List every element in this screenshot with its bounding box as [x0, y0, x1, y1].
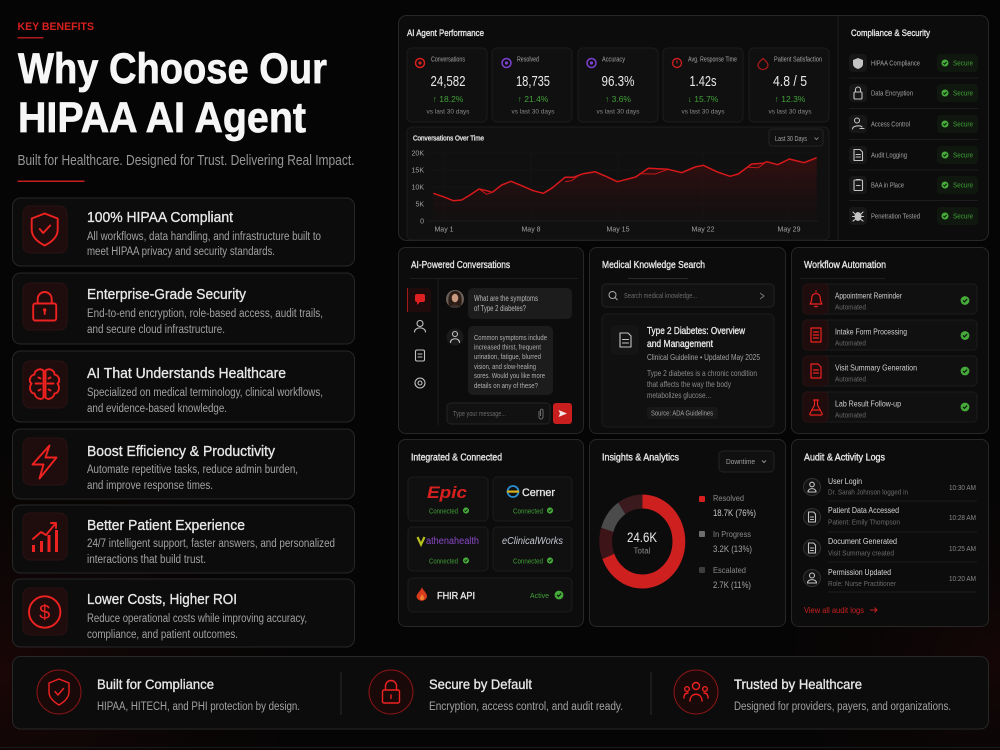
workflow: Appointment Reminder	[803, 284, 977, 314]
KPI: Conversations: 24,582	[430, 74, 466, 90]
sidebar: navigation icons	[407, 288, 431, 388]
KPI: Avg. Response Time: 1.42s	[690, 74, 716, 90]
icon: dollar circle: $	[39, 602, 50, 624]
integration: Cerner: Connected	[513, 508, 543, 516]
search box	[602, 284, 774, 307]
message input	[447, 403, 550, 424]
legend: Resolved	[713, 493, 744, 503]
row: Access Control: Access Control	[871, 122, 910, 128]
eyebrow: key benefits	[18, 21, 94, 38]
panel: Boost Efficiency & Productivity: Boost Efficiency & Productivity	[87, 443, 275, 460]
trust item: Built for Compliance: HIPAA, HITECH, and PHI protection by design.	[97, 701, 300, 713]
KPI: Avg. Response Time: vs last 30 days	[682, 108, 725, 116]
legend: 2.7K (11%)	[713, 580, 751, 590]
row: Access Control	[849, 115, 978, 133]
log: User Login: Dr. Sarah Johnson logged in	[828, 488, 908, 496]
panel: Compliance & Security: Compliance & Security	[851, 28, 930, 39]
chart: conversations over time: Last 30 Days	[775, 136, 807, 143]
chart: conversations over time: Conversations Over Time	[413, 134, 484, 142]
workflow: Lab Result Follow-up	[803, 392, 977, 422]
KPI: Accuracy: vs last 30 days	[596, 108, 640, 116]
chat bubble: assistant answer: Common symptoms include	[474, 333, 547, 342]
chat bubble: assistant answer: sores. Would you like more	[474, 371, 545, 380]
KPI: Patient Satisfaction: ↑ 12.3%	[775, 94, 806, 104]
subtitle: Built for Healthcare. Designed for Trust. Delivering Real Impact.	[18, 153, 354, 169]
panel: Compliance & Security	[849, 28, 978, 225]
workflow: Lab Result Follow-up: Automated	[835, 410, 866, 420]
icon: lock	[33, 292, 56, 320]
log: User Login: User Login	[828, 477, 862, 486]
integration: Cerner: Cerner	[522, 487, 555, 499]
trust item: Secure by Default: Secure by Default	[429, 676, 532, 692]
panel: Better Patient Experience: Better Patient Experience	[87, 517, 245, 534]
panel: Better Patient Experience	[12, 505, 354, 573]
KPI: Patient Satisfaction	[749, 48, 829, 122]
log: Document Generated	[804, 537, 976, 558]
row: Access Control: Secure	[953, 122, 973, 128]
legend: In Progress	[713, 529, 751, 539]
row: Audit Logging: Secure	[953, 152, 973, 160]
integration: eClinicalWorks	[493, 527, 572, 571]
KPI: Accuracy: ↑ 3.6%	[605, 94, 631, 104]
integration: FHIR API: Active	[530, 591, 549, 600]
integration: eClinicalWorks: eClinicalWorks	[502, 536, 563, 547]
row: BAA in Place: Secure	[953, 182, 973, 190]
workflow: Lab Result Follow-up: Lab Result Follow-up	[835, 400, 901, 408]
chat bubble: assistant answer	[468, 326, 553, 395]
KPI: Resolved: ↑ 21.4%	[518, 94, 549, 104]
search result card: and Management	[647, 339, 713, 350]
chart: conversations over time: 5K	[415, 202, 424, 208]
title	[18, 45, 327, 142]
log: Document Generated: 10:25 AM	[949, 544, 976, 553]
chat bubble: assistant answer: urination, fatigue, blurred	[474, 352, 541, 361]
KPI: Resolved	[492, 48, 572, 122]
title: Why Choose Our	[18, 45, 327, 93]
panel: Boost Efficiency & Productivity	[12, 429, 354, 499]
chart: conversations over time	[407, 127, 829, 240]
dropdown: Downtime	[719, 451, 774, 472]
row: Penetration Tested: Secure	[953, 214, 973, 220]
trust item: Secure by Default: Encryption, access control, and audit ready.	[429, 701, 623, 713]
donut total: 24.6K	[627, 529, 658, 545]
icon: lightning bolt	[32, 446, 56, 478]
panel: Audit & Activity Logs	[792, 440, 988, 626]
row: BAA in Place	[849, 176, 978, 194]
chat bubble: patient question: What are the symptoms	[474, 294, 538, 303]
integration: athenahealth: athenahealth	[426, 536, 479, 547]
panel: Workflow Automation: Workflow Automation	[804, 260, 886, 271]
panel: 100% HIPAA Compliant: 100% HIPAA Compliant	[87, 209, 234, 226]
row: Data Encryption: Data Encryption	[871, 90, 913, 98]
panel: Lower Costs, Higher ROI	[12, 579, 354, 647]
chat bubble: patient question: of Type 2 diabetes?	[474, 304, 526, 313]
icon: growth chart	[32, 523, 58, 552]
avatar: patient	[446, 290, 464, 308]
donut chart	[591, 486, 693, 597]
panel: Insights & Analytics: Insights & Analytics	[602, 452, 679, 464]
integration: eClinicalWorks: Connected	[513, 558, 543, 566]
send button	[553, 403, 572, 424]
row: HIPAA Compliance: HIPAA Compliance	[871, 60, 920, 68]
log: Patient Data Accessed: Patient Data Accessed	[828, 506, 899, 515]
KPI: Avg. Response Time: ↓ 15.7%	[688, 94, 719, 104]
trust item: Secure by Default	[369, 670, 623, 714]
row: Penetration Tested: Penetration Tested	[871, 214, 920, 220]
trust item: Trusted by Healthcare: Designed for providers, payers, and organizations.	[734, 701, 951, 713]
log: Permission Updated	[804, 568, 976, 588]
KPI: Patient Satisfaction: Patient Satisfaction	[774, 56, 822, 64]
workflow: Intake Form Processing: Intake Form Processing	[835, 328, 907, 336]
panel: Medical Knowledge Search	[590, 248, 786, 434]
chart: conversations over time: 20K	[412, 150, 424, 158]
panel: Audit & Activity Logs: Audit & Activity Logs	[804, 452, 885, 464]
panel: Integrated & Connected: Integrated & Connected	[411, 452, 502, 464]
panel: AI Agent Performance: AI Agent Performance	[407, 28, 484, 39]
KPI: Patient Satisfaction: vs last 30 days	[768, 108, 812, 116]
KPI: Avg. Response Time: Avg. Response Time	[688, 56, 737, 64]
search result card: Clinical Guideline • Updated May 2025	[647, 353, 760, 362]
integration: FHIR API	[408, 578, 572, 612]
panel: AI-Powered Conversations: AI-Powered Conversations	[411, 260, 510, 271]
chart: conversations over time: May 1	[434, 226, 454, 234]
dropdown: Downtime: Downtime	[726, 457, 755, 466]
panel: AI Agent Performance	[398, 16, 988, 240]
panel: Enterprise-Grade Security: End-to-end encryption, role-based access, audit trails,	[87, 308, 323, 320]
row: Audit Logging	[849, 146, 978, 164]
log: Permission Updated: 10:20 AM	[949, 574, 976, 583]
log: Document Generated: Visit Summary created	[828, 548, 894, 558]
log: Permission Updated: Role: Nurse Practitioner	[828, 579, 897, 588]
log: User Login: 10:30 AM	[949, 483, 976, 492]
KPI: Resolved: Resolved	[517, 56, 539, 64]
row: Data Encryption: Secure	[953, 90, 973, 98]
KPI: Resolved: 18,735	[516, 74, 550, 90]
integration: Epic	[408, 477, 488, 521]
legend: 3.2K (13%)	[713, 544, 752, 554]
integration: athenahealth	[408, 527, 488, 571]
workflow: Visit Summary Generation: Visit Summary Generation	[835, 364, 917, 372]
chart: conversations over time: May 8	[521, 226, 541, 234]
row: Data Encryption	[849, 84, 978, 102]
panel: bottom trust bar	[12, 656, 988, 729]
integration: athenahealth: Connected	[429, 558, 458, 566]
panel: AI That Understands Healthcare: Specialized on medical terminology, clinical workflows,	[87, 387, 323, 399]
KPI: Conversations	[407, 48, 487, 122]
workflow: Visit Summary Generation: Automated	[835, 374, 866, 384]
KPI: Accuracy	[578, 48, 658, 122]
workflow: Appointment Reminder: Appointment Reminder	[835, 292, 902, 300]
KPI: Accuracy: Accuracy	[602, 56, 625, 64]
panel: AI That Understands Healthcare	[12, 351, 354, 422]
KPI: Conversations: ↑ 18.2%	[433, 94, 464, 104]
avatar: assistant	[446, 328, 464, 346]
search result card	[602, 314, 774, 427]
integration: Epic: Epic	[427, 483, 468, 502]
chart: conversations over time: May 22	[692, 226, 715, 234]
log: Permission Updated: Permission Updated	[828, 568, 891, 577]
workflow: Intake Form Processing	[803, 320, 977, 350]
workflow: Appointment Reminder: Automated	[835, 302, 866, 312]
log: Patient Data Accessed: 10:28 AM	[949, 513, 976, 522]
icon: dollar circle	[29, 596, 60, 628]
panel: Better Patient Experience: 24/7 intelligent support, faster answers, and personalized	[87, 538, 335, 550]
panel: Integrated & Connected	[398, 440, 584, 626]
panel: Boost Efficiency & Productivity: and improve response times.	[87, 480, 213, 492]
integration: Epic: Connected	[429, 508, 458, 516]
title: HIPAA AI Agent	[18, 94, 306, 142]
chart: conversations over time: May 29	[778, 226, 801, 234]
log: User Login	[804, 477, 976, 496]
link: view all audit logs: View all audit logs	[804, 605, 864, 615]
chat bubble: assistant answer: details on any of these?	[474, 381, 538, 390]
legend	[699, 493, 756, 590]
trust item: Built for Compliance: Built for Compliance	[97, 676, 214, 692]
log: Document Generated: Document Generated	[828, 537, 897, 546]
panel: Lower Costs, Higher ROI: compliance, and patient outcomes.	[87, 629, 238, 641]
panel: 100% HIPAA Compliant: meet HIPAA privacy and security standards.	[87, 246, 275, 258]
eyebrow: key benefits: KEY BENEFITS	[18, 21, 94, 33]
panel: Boost Efficiency & Productivity: Automate repetitive tasks, reduce admin burden,	[87, 464, 298, 476]
panel: Enterprise-Grade Security: and secure cloud infrastructure.	[87, 324, 225, 336]
message input: Type your message...	[453, 409, 506, 418]
icon: shield check	[32, 214, 58, 246]
trust item: Built for Compliance	[37, 670, 300, 714]
legend: 18.7K (76%)	[713, 508, 756, 518]
panel: AI-Powered Conversations	[398, 248, 584, 434]
search result card: that affects the way the body	[647, 380, 731, 389]
donut total	[627, 529, 658, 556]
KPI: Accuracy: 96.3%	[602, 74, 635, 90]
icon: brain	[30, 369, 59, 399]
workflow: Intake Form Processing: Automated	[835, 338, 866, 348]
chart: conversations over time: May 15	[607, 226, 630, 234]
log: Patient Data Accessed: Patient: Emily Thompson	[828, 518, 900, 526]
trust item: Trusted by Healthcare	[674, 670, 951, 714]
panel: Insights & Analytics	[590, 440, 786, 626]
panel: Workflow Automation	[792, 248, 988, 434]
panel: 100% HIPAA Compliant	[12, 198, 354, 266]
log: Patient Data Accessed	[804, 506, 976, 526]
search result card: metabolizes glucose...	[647, 391, 711, 400]
KPI: Patient Satisfaction: 4.8 / 5	[773, 74, 807, 90]
integration: Cerner	[493, 477, 572, 521]
workflow: Visit Summary Generation	[803, 356, 977, 386]
panel: Lower Costs, Higher ROI: Lower Costs, Higher ROI	[87, 591, 237, 608]
search box: Search medical knowledge...	[624, 291, 697, 300]
KPI: Resolved: vs last 30 days	[512, 108, 555, 116]
search result card: Type 2 diabetes is a chronic condition	[647, 369, 757, 378]
trust item: Trusted by Healthcare: Trusted by Healthcare	[734, 676, 862, 692]
panel: 100% HIPAA Compliant: All workflows, data handling, and infrastructure built to	[87, 231, 321, 243]
panel: Lower Costs, Higher ROI: Reduce operational costs while improving accuracy,	[87, 613, 307, 625]
chart: conversations over time: 0	[420, 218, 424, 226]
search result card: Type 2 Diabetes: Overview	[647, 326, 746, 337]
search result card: Source: ADA Guidelines	[651, 408, 713, 418]
row: BAA in Place: BAA in Place	[871, 182, 904, 190]
chat bubble: assistant answer: increased thirst, frequent	[474, 342, 542, 352]
chart: conversations over time: 15K	[412, 168, 424, 174]
row: Audit Logging: Audit Logging	[871, 152, 907, 160]
KPI: Conversations: Conversations	[431, 56, 465, 64]
KPI: Conversations: vs last 30 days	[426, 108, 470, 116]
row: Penetration Tested	[849, 207, 978, 225]
row: HIPAA Compliance	[849, 54, 978, 72]
donut total: Total	[634, 546, 651, 556]
integration: FHIR API: FHIR API	[437, 590, 475, 602]
panel: Better Patient Experience: interactions that build trust.	[87, 554, 206, 566]
KPI: Avg. Response Time	[663, 48, 743, 122]
panel: AI That Understands Healthcare: and evidence-based knowledge.	[87, 403, 227, 415]
chat bubble: assistant answer: vision, and slow-healing	[474, 362, 536, 371]
row: HIPAA Compliance: Secure	[953, 60, 973, 68]
panel: Medical Knowledge Search: Medical Knowledge Search	[602, 260, 705, 271]
panel: Enterprise-Grade Security: Enterprise-Grade Security	[87, 286, 246, 303]
chart: conversations over time: 10K	[412, 184, 424, 192]
panel: AI That Understands Healthcare: AI That Understands Healthcare	[87, 365, 286, 382]
legend: Escalated	[713, 565, 746, 575]
chat bubble: patient question	[468, 288, 572, 319]
panel: Enterprise-Grade Security	[12, 273, 354, 344]
